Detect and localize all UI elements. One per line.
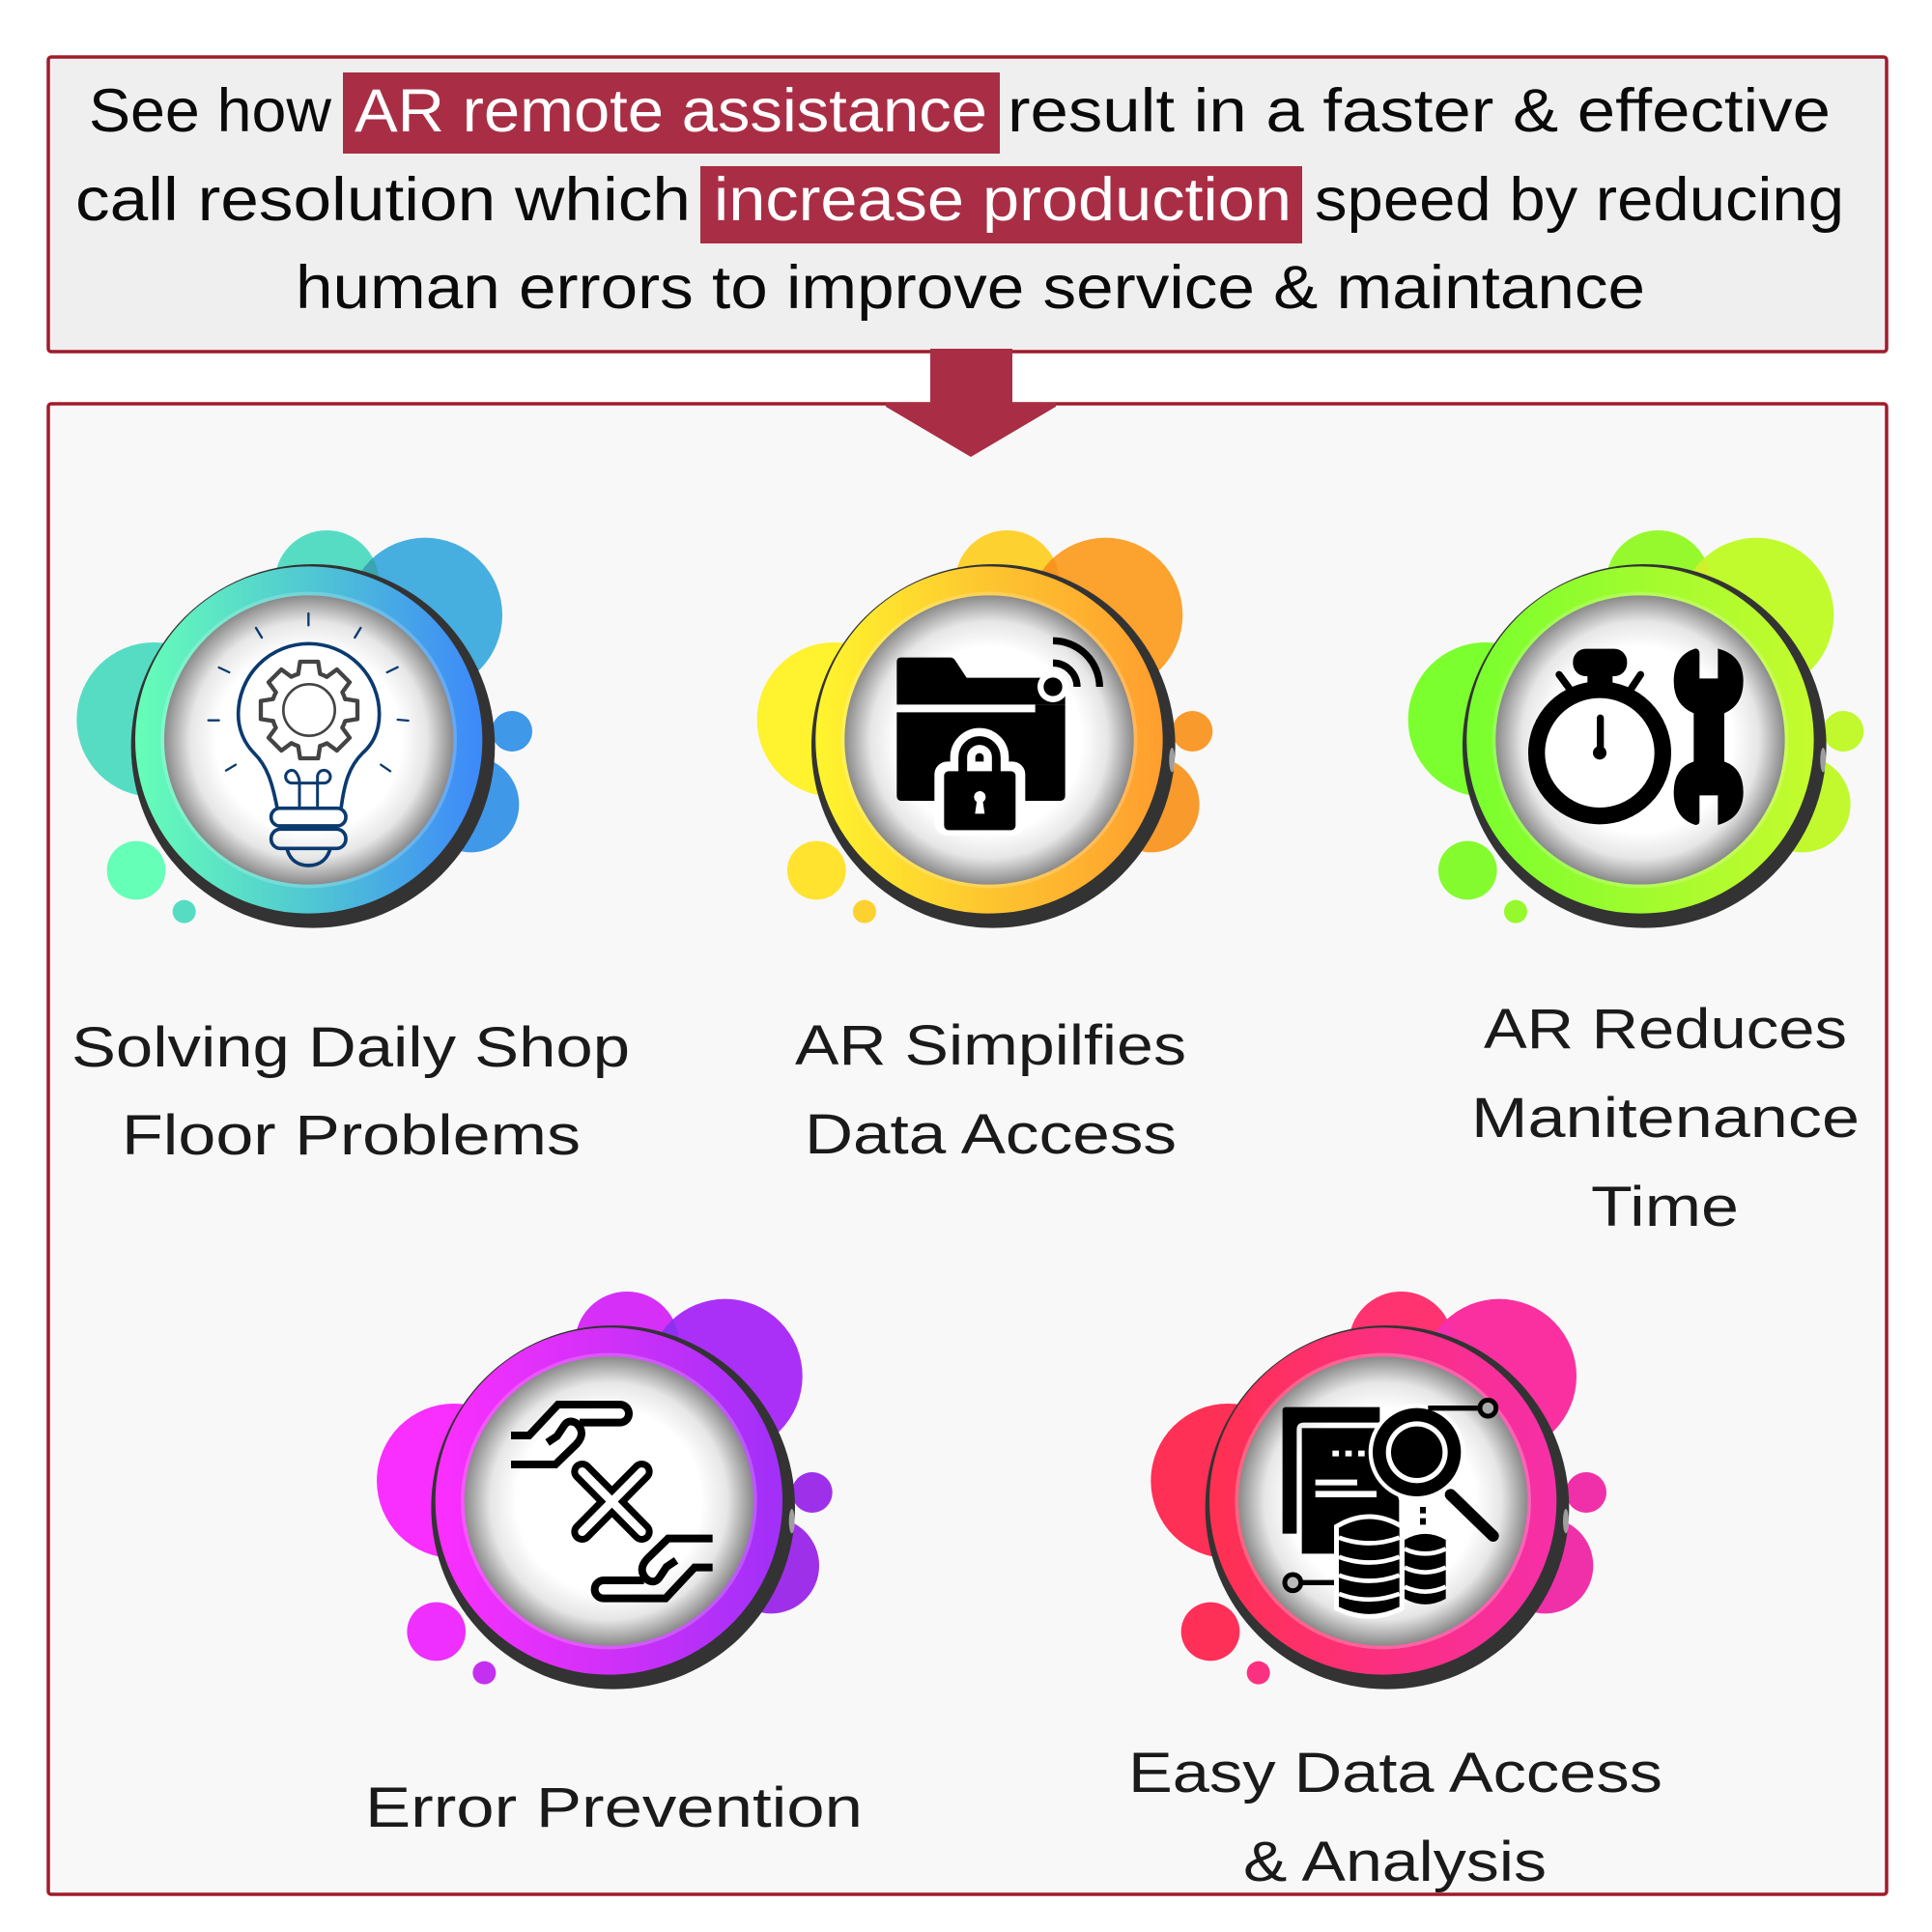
- label: Solving Daily Shop Floor Problems: Solving Daily Shop: [71, 1016, 630, 1079]
- bubbles and ring: purple: [377, 1292, 833, 1690]
- icon: light bulb with gear: [76, 530, 532, 928]
- bubbles and ring: green: [1408, 530, 1863, 928]
- label: Solving Daily Shop Floor Problems: [71, 1016, 630, 1167]
- arrow down: [886, 349, 1056, 457]
- panel: intro statement: [48, 57, 1887, 352]
- label: AR Simpilfies Data Access: Data Access: [805, 1103, 1177, 1166]
- label: Error Prevention: Error Prevention: [365, 1776, 863, 1839]
- text line 1b: AR remote assistance: [355, 77, 987, 145]
- label: Easy Data Access & Analysis: & Analysis: [1243, 1831, 1547, 1893]
- stopwatch and wrench glyph: [1537, 648, 1744, 825]
- text line 2b: increase production: [714, 166, 1292, 234]
- label: Easy Data Access & Analysis: Easy Data Access: [1128, 1742, 1662, 1804]
- label: AR Reduces Manitenance Time: AR Reduces: [1484, 998, 1847, 1061]
- text line 3: human errors to improve service & maintance: [296, 254, 1645, 322]
- label: AR Reduces Manitenance Time: Time: [1591, 1176, 1739, 1238]
- icon: folder with lock and wifi: [757, 530, 1212, 928]
- text line 1a: See how: [89, 77, 332, 145]
- icon: stopwatch and wrench: [1408, 530, 1863, 928]
- label: Solving Daily Shop Floor Problems: Floor Problems: [122, 1104, 581, 1167]
- label: AR Simpilfies Data Access: AR Simpilfies: [795, 1014, 1186, 1077]
- hands glyph: [511, 1405, 713, 1599]
- label: Easy Data Access & Analysis: [1128, 1742, 1662, 1893]
- data analysis glyph: [1283, 1400, 1496, 1614]
- highlight: increase production: [700, 166, 1302, 243]
- label: AR Simpilfies Data Access: [795, 1014, 1186, 1166]
- icon: hands with cross: [377, 1292, 833, 1690]
- text line 2c: speed by reducing: [1315, 166, 1844, 234]
- text line 1c: result in a faster & effective: [1008, 77, 1831, 145]
- bubbles and ring: yellow: [757, 530, 1212, 928]
- intro box: [48, 57, 1887, 352]
- folder glyph: [896, 640, 1099, 836]
- panel: benefits: [48, 404, 1887, 1894]
- highlight: AR remote assistance: [343, 72, 1000, 154]
- label: AR Reduces Manitenance Time: Manitenance: [1471, 1087, 1860, 1150]
- text line 2a: call resolution which: [75, 166, 691, 234]
- bubbles and ring: pink: [1151, 1292, 1606, 1690]
- bulb glyph: [209, 613, 409, 866]
- icon: documents, magnifier and database: [1151, 1292, 1606, 1690]
- label: AR Reduces Manitenance Time: [1471, 998, 1860, 1238]
- bubbles and ring: teal: [76, 530, 532, 928]
